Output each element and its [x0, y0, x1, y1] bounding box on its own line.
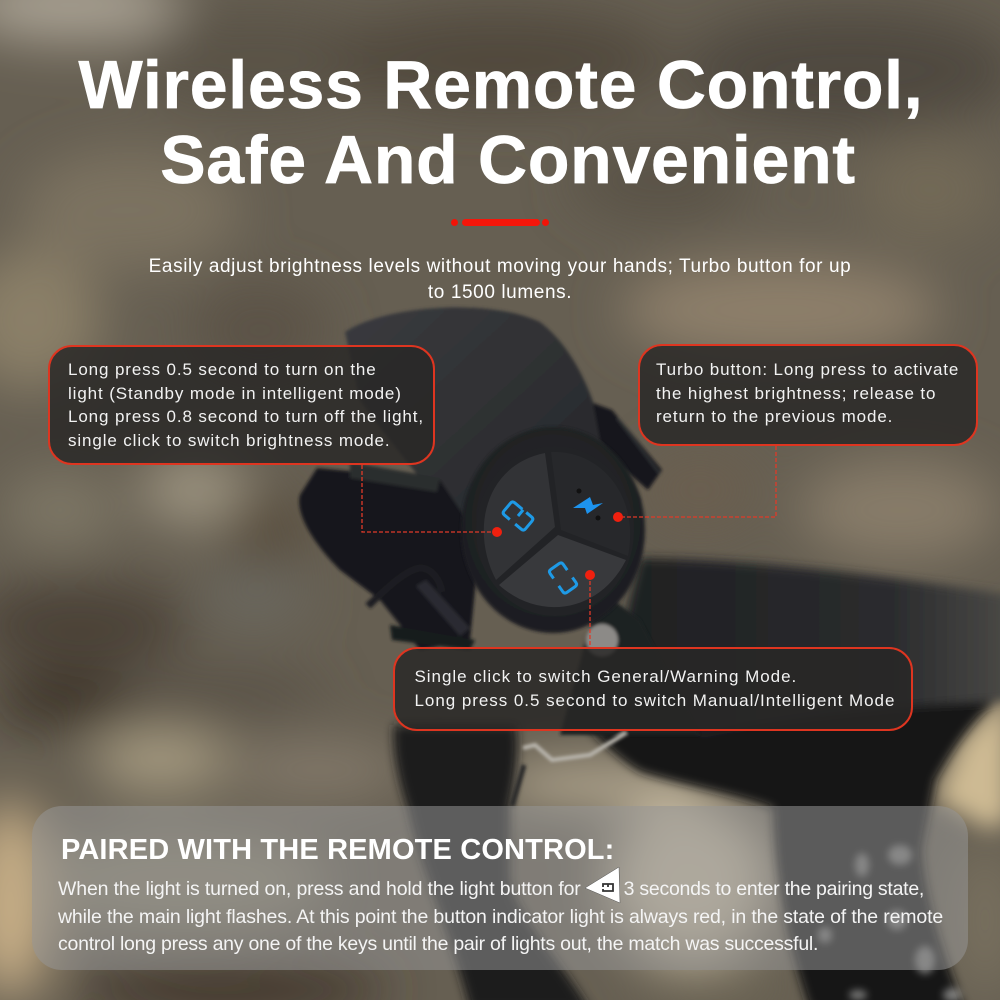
- leader: turbo: [613, 446, 776, 522]
- subtitle: Easily adjust brightness levels without moving your hands; Turbo button for up: [149, 256, 851, 277]
- fork speckles: [818, 845, 961, 1000]
- clip right: [593, 403, 662, 490]
- remote body: [461, 427, 645, 633]
- panel text: When the light is turned on, press and hold the light button for 3 seconds to enter the pairing state,: [58, 878, 924, 900]
- ball bolt: [586, 624, 618, 656]
- callout: mode button: Long press 0.5 second to switch Manual/Intelligent Mode: [414, 690, 895, 710]
- callout: mode button: [393, 647, 913, 731]
- loop and tab left: [368, 568, 442, 606]
- panel heading: PAIRED WITH THE REMOTE CONTROL:: [61, 834, 614, 866]
- callout: turbo button: the highest brightness; release to: [656, 384, 936, 402]
- leader: left: [362, 465, 502, 537]
- callout: left button: single click to switch brightness mode.: [68, 430, 390, 450]
- leader: mode: [585, 570, 595, 647]
- callout: left button: light (Standby mode in intelligent mode): [68, 384, 402, 402]
- chrome clamp: [523, 733, 626, 760]
- icon: light button: [502, 501, 534, 531]
- callout: left button: [48, 345, 435, 465]
- strap block: [299, 468, 480, 650]
- red divider: [451, 219, 549, 226]
- subtitle: [149, 256, 851, 303]
- callout: left button: Long press 0.8 second to turn off the light,: [68, 407, 424, 426]
- hood: [345, 307, 640, 580]
- panel text: [58, 878, 943, 955]
- tan highlight right: [935, 690, 1000, 830]
- title: Wireless Remote Control,: [79, 47, 923, 123]
- title: [78, 47, 923, 198]
- callout: turbo button: Turbo button: Long press to activate: [656, 360, 959, 379]
- callout: turbo button: return to the previous mode.: [656, 407, 893, 426]
- remote buttons: [484, 452, 630, 607]
- icon: mode button: [548, 562, 578, 594]
- icon: turbo bolt: [573, 488, 603, 520]
- lower frame shapes: [394, 558, 1000, 1000]
- icon: pairing button triangle: [585, 866, 620, 904]
- subtitle: to 1500 lumens.: [428, 282, 572, 303]
- callout: turbo button: [638, 344, 978, 446]
- title: Safe And Convenient: [160, 122, 856, 198]
- callout: left button: Long press 0.5 second to turn on the: [68, 360, 377, 379]
- panel text: control long press any one of the keys until the pair of lights out, the match was successful.: [58, 933, 818, 955]
- panel text: while the main light flashes. At this point the button indicator light is always red, in the state of the remote: [58, 906, 943, 928]
- callout: mode button: Single click to switch General/Warning Mode.: [414, 667, 797, 686]
- panel: pairing instructions: [32, 806, 968, 970]
